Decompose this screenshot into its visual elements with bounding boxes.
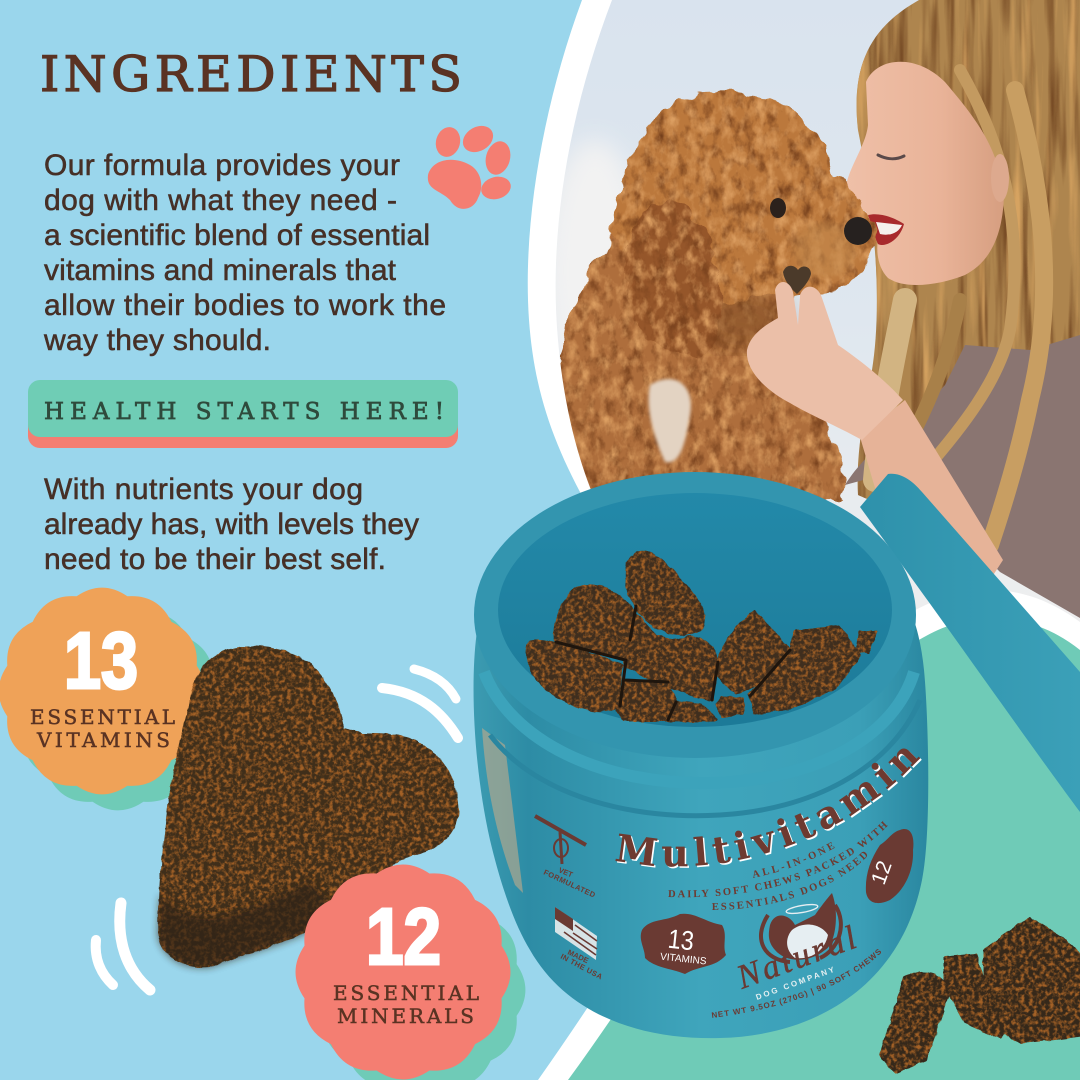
jar side label: [482, 728, 523, 893]
product jar: Multivitamin: [616, 751, 922, 868]
text block: nutrients: already has, with levels they: [44, 508, 419, 541]
badge shadow: vitamins: [15, 604, 221, 810]
label badge: 12 minerals: 12: [867, 858, 897, 888]
woman hand: [747, 282, 903, 440]
dog ear: [625, 201, 721, 355]
jar neck shadow line: [490, 700, 920, 816]
woman ear: [991, 154, 1009, 202]
treat held by woman: [783, 266, 811, 294]
dog snout shading: [793, 222, 857, 278]
white band around teal corner: [538, 590, 1080, 1080]
text block: nutrients: With nutrients your dog: [44, 473, 363, 506]
text block: nutrients: [44, 473, 419, 576]
dog neck shadow: [700, 290, 790, 350]
badge: 13 essential vitamins: 13: [64, 616, 138, 705]
icon: caduceus: [535, 816, 586, 864]
jar rim: [474, 472, 916, 758]
jar body: [474, 615, 928, 1038]
badge: 13 essential vitamins: [0, 588, 205, 794]
product tagline: DAILY SOFT CHEWS PACKED WITH: [668, 820, 888, 898]
badge: 12 essential minerals: 12: [366, 892, 441, 981]
panel: photo of woman and dog: [520, 0, 1080, 640]
dog chest patch: [649, 379, 691, 462]
net weight line: NET WT 9.5OZ (270G) | 90 SOFT CHEWS: [712, 949, 881, 1018]
banner: health starts here: [28, 380, 458, 448]
curved white band beside photo: [0, 0, 620, 1080]
logo: french bulldog: [761, 893, 841, 962]
arcs: motion marks lower left of chew: [96, 903, 150, 990]
label badge: 13 vitamins: VITAMINS: [660, 952, 707, 967]
badge: 12 essential minerals: MINERALS: [337, 1004, 474, 1028]
label badge: 13 vitamins: 13: [666, 924, 695, 956]
badge: 13 essential vitamins: VITAMINS: [36, 728, 170, 752]
woman sweater: [845, 335, 1080, 618]
icon: american flag: [555, 907, 597, 960]
badge: 13 essential vitamins: ESSENTIAL: [30, 705, 175, 729]
jar opening: [498, 493, 892, 727]
badge: 12 essential minerals: [296, 865, 510, 1079]
text block: formula description: Our formula provides your: [44, 149, 400, 182]
product name: [614, 756, 922, 866]
teal corner panel: [568, 618, 1080, 1080]
gaps between chews: [556, 606, 790, 720]
dog eye: [770, 198, 786, 218]
text block: formula description: vitamins and minerals that: [44, 254, 397, 287]
badge shadow: minerals: [315, 885, 525, 1080]
product name dark layer: Multivitamin: [616, 748, 920, 867]
banner: health starts here: HEALTH STARTS HERE!: [44, 399, 444, 425]
title: INGREDIENTS: [40, 46, 462, 103]
woman hair strands: [875, 70, 1044, 545]
jar lid leaning on jar: [860, 474, 1080, 812]
product jar: [474, 472, 928, 1038]
label badge: 13 vitamins: [641, 914, 726, 974]
dog head: [612, 92, 877, 305]
arcs: motion marks upper right of chew: [382, 669, 458, 738]
heart-shaped soft chew: [158, 646, 459, 967]
product tagline: ALL-IN-ONE: [753, 842, 835, 878]
text block: nutrients: need to be their best self.: [44, 543, 386, 576]
dog body: [557, 200, 846, 500]
badge: 12 essential minerals: ESSENTIAL: [333, 981, 479, 1005]
product tagline: ESSENTIALS DOGS NEED: [712, 852, 868, 910]
made in usa text: MADE: [566, 948, 590, 965]
text block: formula description: a scientific blend of essential: [44, 219, 430, 252]
text block: formula description: [43, 149, 446, 357]
text block: formula description: way they should.: [43, 324, 271, 357]
dog nose: [844, 217, 872, 245]
text block: formula description: allow their bodies to work the: [44, 289, 446, 322]
woman hair back: [857, 0, 1080, 548]
chew base shading: [158, 880, 330, 967]
woman forearm: [860, 400, 1003, 580]
woman face: [846, 62, 1004, 285]
logo wordmark: Natural: [731, 919, 861, 997]
chews inside jar: [528, 552, 876, 721]
woman eye: [878, 155, 904, 159]
made in usa text: IN THE USA: [559, 952, 604, 982]
vet formulated text: FORMULATED: [542, 868, 597, 900]
vet formulated text: VET: [557, 866, 575, 879]
light blue background panel: [0, 0, 640, 1080]
label badge: 12 minerals: [866, 829, 913, 903]
logo subline: DOG COMPANY: [755, 964, 838, 1002]
icon: paw print: [428, 121, 514, 209]
text block: formula description: dog with what they need -: [44, 184, 397, 217]
small chews bottom right: [881, 918, 1080, 1072]
woman lips: [868, 214, 904, 245]
